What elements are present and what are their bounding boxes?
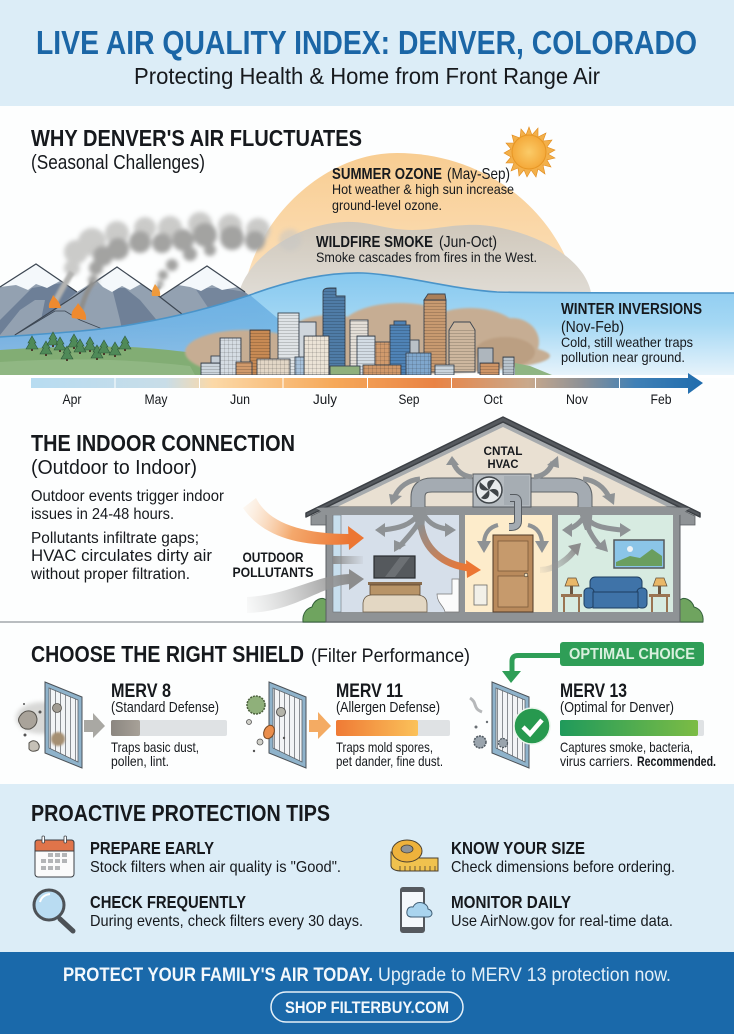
performance bar: MERV 8 [111,720,227,736]
CTA text: PROTECT YOUR FAMILY'S AIR TODAY. [63,964,373,986]
label: MERV 13: MERV 13 [560,681,627,702]
wall window edge [333,515,341,612]
winter inversions label: pollution near ground. [561,349,685,365]
CTA text: Upgrade to MERV 13 protection now. [378,964,671,986]
timeline bar with arrow [0,373,734,394]
heading: choose the right shield: (Filter Performance) [311,646,470,667]
roof underlay [312,421,694,512]
inversion top line [0,273,734,337]
icon: calendar [35,836,74,877]
icon: MERV 13 filter with check [470,682,550,768]
body text: infiltration [30,530,213,583]
description: MERV 11 [336,739,443,769]
icon: MERV 8 filter with dust [16,682,82,768]
text: prepare early: PREPARE EARLY [90,838,214,858]
timeline month labels: July [313,391,337,407]
panel: indoor connection [0,417,703,623]
bed [363,595,427,612]
center duct [509,498,518,527]
summer ozone label: (May-Sep) [447,166,510,183]
panel: proactive protection tips [0,784,734,952]
body text: timing [31,488,224,523]
walls [326,507,680,622]
tip: know your size [391,838,675,876]
arrow: orange pollutant stream [243,498,364,550]
wildfire smoke plumes [55,212,301,312]
wildfire smoke label [316,234,537,265]
filter card: MERV 11 [246,681,450,769]
text: prepare early: Stock filters when air quality is "Good". [90,859,341,876]
timeline month labels: Sep [398,391,420,407]
city smog [185,303,550,375]
tip: monitor daily [400,887,673,933]
room: lounge right [558,515,673,612]
subheading: outdoor to indoor: (Outdoor to Indoor) [31,457,197,479]
wildfire smoke label: (Jun-Oct) [439,234,497,251]
HVAC unit with fan [473,474,531,507]
inversion haze over mountains [0,295,300,362]
roof [306,417,700,517]
body text: infiltration: without proper filtration. [30,566,190,583]
winter inversions label: (Nov-Feb) [561,319,624,336]
wildfire smoke label: WILDFIRE SMOKE [316,234,433,251]
foothills and trees [0,332,215,375]
summer ozone label: SUMMER OZONE [332,166,442,183]
body text: timing: issues in 24-48 hours. [31,506,174,523]
airflow arrow from hallway to right room [540,548,576,570]
arrow: grey leak through wall [333,556,363,564]
arrowhead to right room [568,543,581,556]
performance bar: MERV 13 [560,720,704,736]
filter card: MERV 8 [16,681,227,769]
filter card: MERV 8: (Standard Defense) [111,699,219,716]
text: know your size: Check dimensions before ordering. [451,859,675,876]
text: know your size: KNOW YOUR SIZE [451,838,585,858]
icon: magnifier [34,890,73,931]
description: MERV 11: Traps mold spores, [336,739,433,755]
icon: tape measure [391,840,438,871]
HVAC label: CNTAL [484,444,522,458]
text: monitor daily: Use AirNow.gov for real-time data. [451,913,673,930]
panel: filter performance [16,641,716,769]
badge: optimal choice [560,642,704,666]
room: living room left [341,515,459,612]
timeline month labels: Nov [566,391,588,407]
wall picture [614,540,664,568]
icon: bushes [303,598,703,622]
heading: why Denver's air fluctuates: WHY DENVER'S AIR FLUCTUATES [31,125,362,151]
lamps and tables [561,578,670,612]
ducts [418,485,585,507]
label: outdoor pollutants [232,550,314,580]
label: outdoor pollutants: OUTDOOR [242,550,304,565]
right foothill [515,363,552,375]
summer ozone dome [243,153,580,330]
heading: proactive protection tips: PROACTIVE PROTECTION TIPS [31,800,330,826]
arrow: badge to MERV 13 [502,656,560,683]
air trunks below ducts [410,507,593,530]
performance bar: MERV 11 [336,720,450,736]
icon: fires [49,284,160,320]
label: MERV 8: MERV 8 [111,681,171,702]
sofa [584,577,647,608]
description: MERV 8: pollen, lint. [111,753,169,769]
text: check frequently: During events, check filters every 30 days. [90,913,363,930]
timeline month labels: Jun [230,391,250,407]
toilet [437,579,459,612]
description: MERV 13 [560,739,716,769]
panel: seasonal challenges [0,125,734,407]
panel: header [0,0,734,106]
summer ozone label: ground-level ozone. [332,197,442,213]
timeline month labels: Oct [484,391,503,407]
heading: the indoor connection: THE INDOOR CONNECTION [31,430,295,456]
subtitle: Protecting Health & Home from Front Range Air [134,63,600,89]
timeline month labels: May [144,391,168,407]
attic [337,427,668,507]
tip: check frequently [34,890,363,931]
arrow: MERV 8 [84,713,105,738]
door [493,535,533,612]
panel: call to action footer [0,952,734,1034]
winter inversion layer [0,273,734,375]
label: outdoor pollutants: POLLUTANTS [232,565,314,580]
mountains [0,264,300,350]
icon: MERV 11 filter with allergens [246,682,306,768]
TV [374,556,415,578]
description: MERV 13: Captures smoke, bacteria, [560,739,693,755]
button: shop filterbuy [271,992,463,1022]
HVAC label: HVAC [488,457,519,471]
description: MERV 13: virus carriers. [560,753,633,769]
timeline month labels [62,391,672,407]
text: prepare early [90,838,341,876]
dresser [368,582,422,595]
description: MERV 8: Traps basic dust, [111,739,199,755]
label: MERV 11: MERV 11 [336,681,403,702]
thermostat panel [474,585,487,605]
icon: sun [504,127,555,177]
body text: infiltration: HVAC circulates dirty air [31,547,213,565]
ground line [0,621,703,623]
filter card: MERV 11: (Allergen Defense) [336,699,440,716]
winter inversions label [561,301,702,365]
attic arrowheads [389,456,615,505]
tip: prepare early [35,836,341,877]
icon: phone with cloud [400,887,432,933]
timeline month labels: Feb [650,391,672,407]
CTA text [63,964,671,986]
wildfire smoke label: Smoke cascades from fires in the West. [316,249,537,265]
airflow arrows in attic [395,462,609,497]
filter card: MERV 13: (Optimal for Denver) [560,699,674,716]
summer ozone label: Hot weather & high sun increase [332,181,514,197]
airflow arrow to hallway [421,525,470,568]
heading: choose the right shield: CHOOSE THE RIGHT SHIELD [31,641,304,667]
airflow arrows in left room [375,515,456,552]
room: hallway [465,515,552,612]
badge: optimal choice: OPTIMAL CHOICE [569,646,695,663]
arrowhead to hallway [466,560,481,578]
timeline month labels: Apr [62,391,82,407]
subheading: seasonal challenges: (Seasonal Challenges) [31,152,205,174]
arrow: grey pollutant stream [247,569,364,613]
Denver skyline [201,288,514,375]
house illustration [303,417,703,622]
text: monitor daily [451,892,673,930]
HVAC label [484,444,522,471]
arrow: MERV 11 [309,712,331,739]
airflow arrows in hallway [477,525,549,553]
winter inversions label: Cold, still weather traps [561,334,693,350]
body text: infiltration: Pollutants infiltrate gaps; [31,530,199,547]
airflow arrows in right room [562,515,631,552]
winter inversions label: WINTER INVERSIONS [561,301,702,318]
wildfire smoke dome [238,222,592,330]
description: MERV 11: pet dander, fine dust. [336,753,443,769]
text: monitor daily: MONITOR DAILY [451,892,571,912]
body text: timing: Outdoor events trigger indoor [31,488,224,505]
button: shop filterbuy: SHOP FILTERBUY.COM [285,998,449,1017]
filter card: MERV 13 [470,681,716,769]
summer ozone label [332,166,514,213]
description: MERV 8 [111,739,199,769]
text: check frequently [90,892,363,930]
text: check frequently: CHECK FREQUENTLY [90,892,246,912]
text: know your size [451,838,675,876]
